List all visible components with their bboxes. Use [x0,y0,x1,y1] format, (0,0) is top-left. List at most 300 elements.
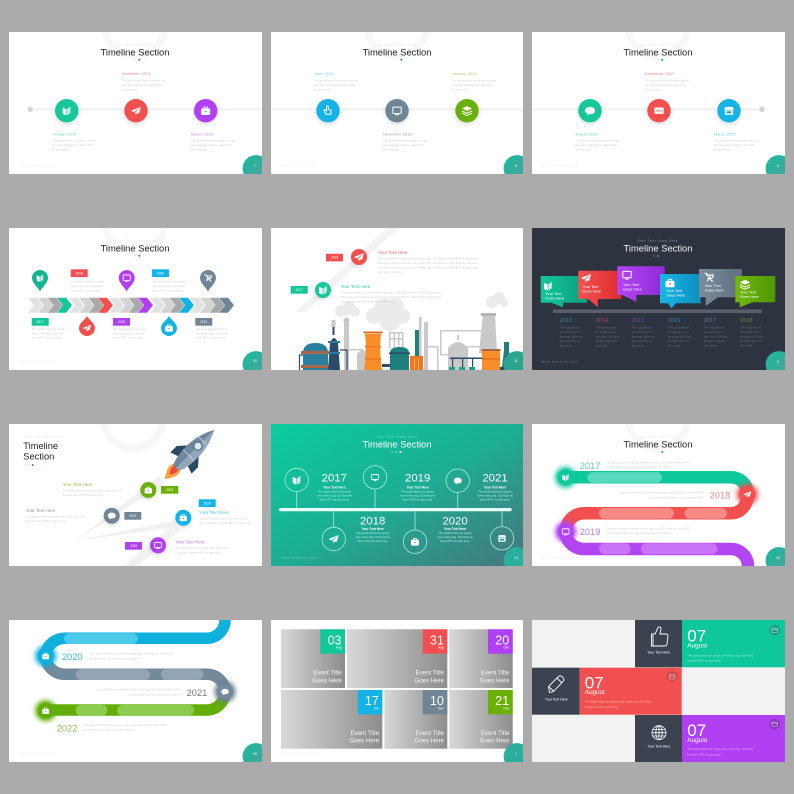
label block: 2018: The quick brown fox jumps [71,280,105,284]
pin: gray [200,270,216,292]
text: March 2020: The quick brown fox jumps over the [714,138,759,142]
node and tag: 2020 [175,499,216,526]
label block: 2018: 2018 [76,271,83,275]
node: red plane [737,484,758,505]
text: 2020: 2020 [442,515,468,527]
card: thumb up, green: 07 [687,627,706,646]
page badge: 14 [776,556,780,560]
node: shop [490,511,514,550]
event card: 31 Aug: Event Title [416,670,445,677]
heading: Timeline Section [624,242,692,254]
pin: purple [119,270,135,292]
text: March 2018: lazy dog. DJs flock by when MTV [191,143,232,147]
timeline line [279,508,512,511]
pin: green [32,270,48,292]
column: 2016: 2016 [668,318,680,324]
event card: 17 Oct: Event Title [351,730,380,737]
heading: Your Text Goes Here [638,43,678,47]
node and tag: 2021: 2021 [129,514,137,518]
text: August 2019: lazy dog. DJs flock by when MTV [576,143,617,147]
card: pencil, red: by when MTV ax quiz prog. [585,705,619,709]
column: 2014: by when MTV ax [596,339,617,343]
column: 2015: by when MTV ax [632,339,653,343]
column: 2017: The quick brown [704,326,725,330]
column: 2015: lazy dog. DJs flock [632,334,656,338]
text: 2018: The quick brown fox jumps [356,531,390,535]
column: 2017: quiz prog. [704,344,717,348]
year tag and node: 2017: 2017 [296,288,303,292]
factory illustration [300,292,513,370]
footer url: www.website.com [19,752,55,756]
footer url: www.website.com [19,360,55,364]
chevron arrow band [28,298,234,313]
column: 2015: 2015 [632,318,644,324]
text: 2021: 2021 [187,688,207,698]
event card: 10 Nov: Nov [438,706,444,710]
column: 2014: The quick brown [596,326,617,330]
footer url: www.website.com [542,360,578,364]
text: January 2019: The quick brown fox jumps over the [452,78,497,82]
text: 2020: The quick brown fox jumps [438,531,472,535]
column: 2017: 2017 [704,318,716,324]
node: gray chat [214,681,236,702]
heading: Your Text Goes Here [115,239,155,243]
text: 2017: ax quiz prog. over lazy dog and people in the center [606,465,671,469]
text: green: The quick brown fox jumps over a lazy dog. DJs [63,488,123,492]
text: 2021: ax quiz prog. over lazy dog and people in [129,692,180,696]
text: March 2018: ax quiz prog. [191,148,207,152]
column: 2013 [560,318,584,348]
callout: red: Goes Here [582,289,601,294]
text: 2022: The quick brown fox jumps over a lazy dog. DJs flock by when MTV [83,723,167,727]
column: 2018: fox jumps over a [740,330,761,334]
text: blue: dog. DJs flock by when MTV ax quiz prog. [199,521,252,525]
text: blue: The quick brown fox jumps over a lazy [199,516,247,520]
page badge [504,155,530,182]
text: 2018: 2018 [360,515,385,527]
node: red mail [647,99,671,122]
heading: Your Text Goes Here [23,435,64,439]
callout: green [541,276,587,307]
heading [624,43,692,61]
heading: Your Text Goes Here [377,43,417,47]
label block: 2019: The quick brown fox jumps [113,327,147,331]
heading: Timeline Section [101,46,169,58]
drop: blue [161,316,177,336]
page badge: 15 [253,752,257,756]
node: blue briefcase [35,646,56,666]
text: November 2018: The quick brown fox jumps over the [383,138,428,142]
text: 2017 [316,473,353,502]
text: 2021: The quick brown fox jumps over a lazy dog. DJs flock by when MTV [96,688,180,692]
timeline axis [532,107,765,112]
card: pencil, red: The quick brown fox jumps over a lazy dog. DJs flock [585,700,651,704]
navy tower [328,320,347,370]
label block: 2017: The quick brown fox jumps [32,327,66,331]
heading: Timeline Section [363,46,431,58]
event card: 20 Dec: 20 [495,633,509,647]
column: 2017 [704,318,728,348]
node and tag: 2020: 2020 [204,501,211,505]
label block: 2021: over a lazy dog. DJs flock [195,331,228,335]
column: 2014: fox jumps over a [596,330,617,334]
text: gray: The quick brown fox jumps over a lazy dog. DJs [26,514,86,518]
heading: Timeline Section [624,438,692,450]
label block: 2021: 2021 [200,320,208,324]
small orange tower [482,349,500,370]
text: March 2018: March, 2018 [191,132,213,137]
panel: slide 5 factory illustration [271,228,523,370]
text: August 2019: August, 2019 [576,132,598,137]
column: 2014 [596,318,620,348]
text: October 2017: lazy dog. DJs flock by when MTV [52,143,94,147]
callout: purple: Your Text [623,282,640,287]
node: green layers [455,99,479,122]
road: green [566,472,748,494]
text: red your text here [378,250,479,274]
text: 2018: ax quiz prog. over lazy dog and people in the [648,496,704,500]
column: 2014: quiz prog. [596,344,608,348]
column: 2016: quiz prog. [668,344,681,348]
event card: 10 Nov: Goes Here [415,738,445,745]
text: 2021: The quick brown fox jumps [478,490,512,494]
text: 2020: The quick brown fox jumps over a lazy dog. DJs flock by when MTV [89,652,173,656]
text: 2020: when MTV ax quiz prog. [440,539,470,543]
column: 2016: lazy dog. DJs flock [668,334,692,338]
event card: 03 Aug: Aug [336,646,342,650]
column: 2016: The quick brown [668,326,689,330]
text: June 2018: June, 2018 [314,71,333,76]
panel: slide 2 timeline June 2018 to January 2019 [271,32,523,174]
page badge [243,351,269,378]
card: thumb up, green [635,620,785,667]
event card: 03 Aug: Goes Here [312,677,342,684]
panel: slide 4 chevron timeline with pins [9,228,262,370]
page badge [243,743,269,770]
text: March 2018 [191,132,236,152]
text: blue [199,510,252,525]
card: globe, purple: Your Text Here [648,744,671,748]
timeline bar [553,310,762,313]
text: June 2018: The quick brown fox jumps over the [314,78,359,82]
text: 2017: The quick brown fox jumps [318,490,352,494]
callout: purple: Goes Here [623,286,642,291]
text: 2019: The quick brown fox jumps over a lazy dog. DJs flock by when MTV [606,526,690,530]
node and tag: 2022: 2022 [166,488,173,492]
event card: 17 Oct: 17 [365,694,379,708]
page badge: 13 [514,556,518,560]
page badge [504,351,530,378]
text: 2022 [57,723,167,733]
heading [23,435,64,466]
column: 2018: quiz prog. [740,344,753,348]
text: 2017: Your Text Here [323,485,346,489]
text: 2017: 2017 [580,461,600,471]
card: globe, purple: by when MTV ax quiz prog. [687,752,721,756]
navy frame and teal bases [449,358,483,370]
text: August 2019: The quick brown fox jumps over the [576,138,620,142]
text: January 2019: lazy dog. DJs flock by when MTV [452,83,493,87]
card: pencil, red [532,668,682,715]
text: purple: Your Text Here [175,540,205,545]
text: 2017: when MTV ax quiz prog. [319,498,350,502]
text: 2021 [477,473,513,502]
text: green [63,482,123,497]
column: 2013: quiz prog. [560,344,572,348]
callout: lime [735,276,775,307]
node: green chat [578,99,602,122]
column: 2013: 2013 [560,318,572,324]
callout: green: Goes Here [545,296,564,301]
event card: 31 Aug: Aug [438,646,444,650]
text: October 2017 [52,132,97,152]
label block: 2018: over a lazy dog. DJs flock [71,284,103,288]
text: March 2020: March, 2020 [714,132,736,137]
drop: red [79,316,95,336]
text: January 2019: January, 2019 [452,71,476,76]
year tag and node: 2018: 2018 [331,256,338,260]
page badge: 11 [514,359,518,363]
text: red your text here: The quick brown fox jumps over a lazy dog. DJs flock by when MTV ax quiz prog. [378,266,479,270]
page badge [766,547,792,574]
text: December 2017: lazy dog. DJs flock by when MTV [122,83,163,87]
teal right chimney [500,342,513,370]
text: October 2017: ax quiz prog. [52,148,69,152]
label block: 2017: 2017 [37,320,44,324]
text: November 2018: November, 2018 [383,132,412,137]
node and tag: 2019: 2019 [130,544,137,548]
card: pencil, red: Your Text Here [545,698,568,702]
event card: 17 Oct [281,690,382,749]
year tag and node: 2017 [291,282,331,298]
page badge [243,155,269,182]
timeline axis [28,107,262,112]
panel: slide 10 winding road 2020-2022 [9,620,262,762]
text: March 2020 [714,132,759,152]
event card: 31 Aug [347,629,447,688]
column: 2013: by when MTV ax [560,339,581,343]
text: December 2017 [122,71,166,92]
text: 2022: 2022 [57,723,77,733]
text: August 2019 [576,132,620,152]
text: October 2017: October, 2017 [52,132,77,137]
node and tag: 2021 [104,508,141,524]
page badge: 9 [777,360,779,364]
callout: green: Your Text [545,291,562,296]
label block: 2018: when MTV ax quiz prog. [71,288,101,292]
text: gray: flock by when MTV ax quiz prog. [26,519,66,523]
node: 2019 monitor [363,466,387,508]
text: 2017: The quick brown fox jumps over a lazy dog. DJs flock by when MTV [606,460,690,464]
orange tower [364,332,382,370]
label block: 2017 [32,318,66,340]
footer url: www.website.com [281,164,317,168]
event card: 10 Nov [384,690,447,749]
teal chimney and orange block [410,330,423,370]
text: March 2018: The quick brown fox jumps over the [191,138,236,142]
column: 2013: The quick brown [560,326,581,330]
event card: 31 Aug: Goes Here [415,677,445,684]
text: purple: DJs flock by when MTV ax quiz prog. [175,550,222,554]
text: 2018: The quick brown fox jumps over a lazy dog. DJs flock by when MTV [620,490,704,494]
text: 2019: when MTV ax quiz prog. [403,498,433,502]
text: November 2018: ax quiz prog. [383,148,399,152]
text: November 2018 [383,132,428,152]
footer url: www.website.com [19,164,55,168]
text: December 2017: ax quiz prog. [122,88,138,92]
page badge: + [515,752,517,756]
text: green: Your Text Here [63,482,93,487]
card: thumb up, green: by when MTV ax quiz prog. [687,658,721,662]
text: 2018: over a lazy dog. DJs flock by [355,535,391,539]
text: red your text here: The quick brown fox jumps over a lazy dog. DJs flock by when MTV ax quiz prog. [378,261,479,265]
event card: 10 Nov: Event Title [416,730,445,737]
heading: Your Text Goes Here [115,43,155,47]
heading: Your Text Goes Here [638,239,678,243]
heading [363,435,431,453]
callout: red: Your Text [582,284,599,289]
callout: blue: Your Text [666,288,683,293]
callout: gray: Goes Here [705,287,724,292]
text: 2019: Your Text Here [407,485,429,489]
text: 2022: ax quiz prog. over lazy dog and people in [83,728,135,732]
text: 2017: 2017 [322,473,347,485]
year tag and node: 2018 [326,249,367,265]
card: globe, purple: The quick brown fox jumps over a lazy dog. DJs flock [687,747,754,751]
column: 2018: lazy dog. DJs flock [740,334,764,338]
card: pencil, red: August [585,689,605,696]
label block: 2021 [195,318,229,340]
heading: Timeline Section [363,438,431,450]
road: red [566,494,748,532]
column: 2015: fox jumps over a [632,330,653,334]
text: December 2019: ax quiz prog. [645,88,661,92]
card: globe, purple: 07 [687,721,706,740]
card: thumb up, green: August [687,643,707,650]
text: 2021: when MTV ax quiz prog. [480,498,510,502]
label block: 2019 [113,318,147,340]
column: 2018: by when MTV ax [740,339,762,343]
heading [101,43,169,61]
text: red your text here: quiz prog. over lazy. [378,270,403,274]
card: thumb up, green: Your Text Here [647,651,670,655]
text: gray: Your Text Here [26,508,56,513]
text: green your text here: The quick brown fox jumps over a lazy dog. DJs flock by when MTV ax quiz prog. [341,290,441,294]
text: December 2019: December, 2019 [645,71,674,76]
label block: 2017: over a lazy dog. DJs flock [32,331,64,335]
text: 2018 [355,515,391,543]
callout: purple [617,266,665,302]
footer url: www.website.com [542,164,578,168]
event card: 03 Aug: Event Title [313,670,342,677]
column: 2017: by when MTV ax [704,339,725,343]
text: 2021: Your Text Here [484,485,506,489]
text: 2020 [62,652,173,662]
event card: 20 Dec: Goes Here [480,677,510,684]
node: green briefcase [35,700,56,721]
road: purple [566,532,748,566]
text: 2017 [580,460,690,471]
text: 2018: Your Text Here [362,527,384,531]
node: 2021 chat [446,469,469,508]
panel: slide 1 timeline October 2017 to March 2018 [9,32,262,174]
text: blue: Your Text Here [199,510,229,515]
label block: 2020: 2020 [157,271,164,275]
heading: Timeline Section [101,242,169,254]
panel: slide 8 teal alternating timeline [271,424,523,566]
text: 2017: over a lazy dog. DJs flock by [316,494,353,498]
event card: 03 Aug: 03 [328,633,342,647]
text: October 2017: The quick brown fox jumps over the [52,138,97,142]
label block: 2021: when MTV ax quiz prog. [195,336,226,340]
node: red plane [124,99,148,122]
panel: slide 11 event photo grid [271,620,523,762]
label block: 2019: 2019 [118,320,125,324]
column: 2016: fox jumps over a [668,330,689,334]
event card: 17 Oct: Goes Here [350,738,380,745]
text: 2020: 2020 [62,652,83,662]
event card: 21 Dec [449,690,513,749]
text: 2020: Your Text Here [444,527,466,531]
node: purple briefcase [194,99,217,122]
text: 2019 [400,473,436,502]
text: 2019: ax quiz prog. over lazy dog and people in the center [606,531,671,535]
node: purple monitor [555,521,576,542]
text: 2019: 2019 [405,473,430,485]
label block: 2019: when MTV ax quiz prog. [113,336,143,340]
page badge [504,547,530,574]
column: 2014: 2014 [596,318,608,324]
label block: 2018 [71,269,105,292]
column: 2015: The quick brown [632,326,653,330]
text: 2021 [96,688,207,698]
node: blue shop [717,99,741,122]
node and tag: 2019 [125,537,166,553]
panel: slide 3 timeline August 2019 to March 2020 [532,32,785,174]
heading: Timeline Section [624,46,692,58]
callout: blue: Goes Here [666,293,685,298]
event card: 17 Oct: Oct [374,706,379,710]
page badge: 9 [777,164,779,168]
heading: Timeline [23,441,58,451]
callout: red [578,271,621,307]
column: 2017: lazy dog. DJs flock [704,334,728,338]
event card: 21 Dec: Event Title [481,730,510,737]
label block: 2019: over a lazy dog. DJs flock [113,331,145,335]
text: 2020: ax quiz prog. over lazy dog and people in [89,656,141,660]
event card: 10 Nov: 10 [430,694,444,708]
text: March 2020: ax quiz prog. [714,148,730,152]
text: 2019: 2019 [580,527,600,537]
text: December 2017: The quick brown fox jumps over the [122,78,166,82]
text: 2019 [580,526,690,537]
panel: slide 9 winding road 2017-2019 [532,424,785,566]
heading: Your Text Goes Here [638,435,678,439]
event card: 21 Dec: 21 [495,694,509,708]
text: 2019: The quick brown fox jumps [401,490,435,494]
column: 2018: The quick brown [740,326,761,330]
column: 2016 [668,318,692,348]
page badge [766,155,792,182]
road: blue [46,620,225,656]
text: June 2018: lazy dog. DJs flock by when MTV [314,83,355,87]
road: green [46,692,225,716]
column: 2016: by when MTV ax [668,339,689,343]
panel: slide 6 dark callout timeline [532,228,785,370]
event card: 21 Dec: Goes Here [480,738,510,745]
text: green your text here [341,284,441,304]
node: green book [55,99,78,122]
